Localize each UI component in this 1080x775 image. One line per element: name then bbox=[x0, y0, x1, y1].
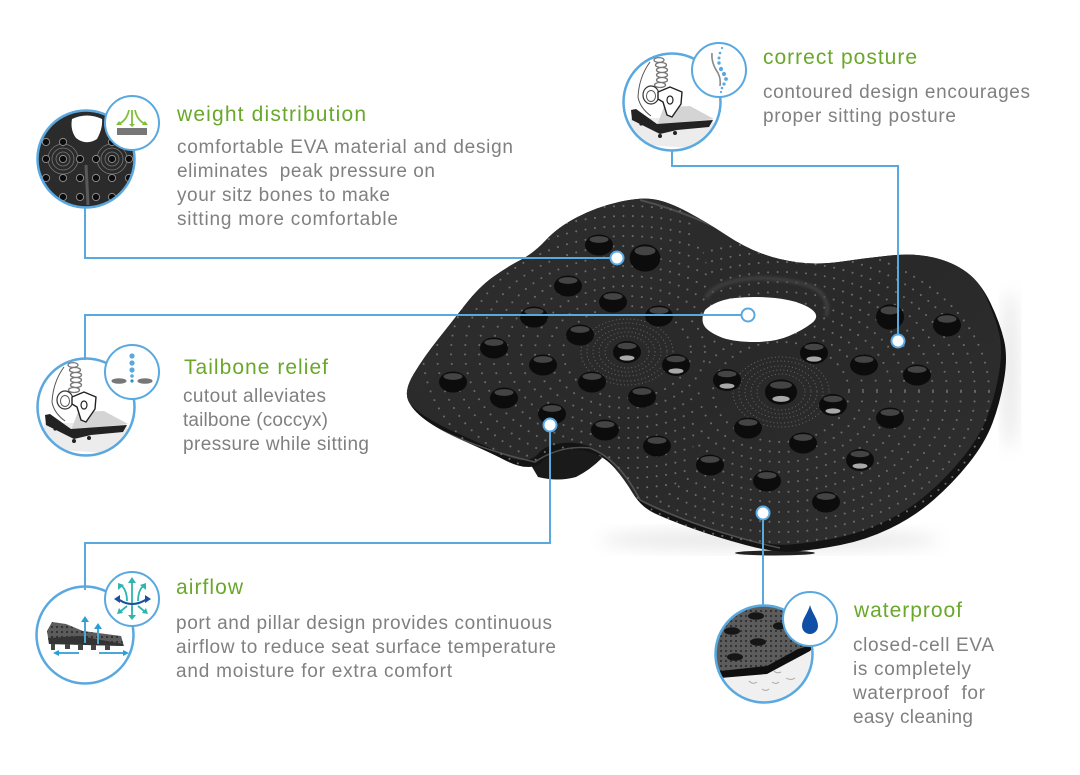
thumbnail: cushion top view bbox=[38, 110, 134, 208]
body text: your sitz bones to make bbox=[177, 185, 390, 206]
body text bbox=[176, 613, 556, 682]
body text: closed-cell EVA bbox=[853, 635, 994, 656]
body text: cutout alleviates bbox=[183, 386, 326, 407]
body text: port and pillar design provides continuous bbox=[176, 613, 552, 634]
panel: weight distribution bbox=[38, 96, 513, 230]
body text: eliminates peak pressure on bbox=[177, 161, 435, 182]
heading: airflow bbox=[176, 576, 244, 599]
thumbnail: cushion side with airflow arrows bbox=[36, 586, 134, 684]
marker: airflow bbox=[544, 418, 556, 432]
body text: comfortable EVA material and design bbox=[177, 137, 513, 158]
heading: Tailbone relief bbox=[184, 356, 328, 379]
marker: waterproof bbox=[756, 506, 770, 520]
icon: tailbone dots bbox=[105, 345, 159, 399]
icon: spine curve bbox=[692, 43, 746, 97]
heading: waterproof bbox=[853, 599, 962, 622]
body text: pressure while sitting bbox=[183, 434, 369, 455]
panel: airflow bbox=[36, 572, 556, 684]
body text bbox=[177, 137, 513, 230]
body text: is completely bbox=[853, 659, 972, 680]
cushion photo bbox=[402, 192, 1017, 555]
thumbnail: wet cushion surface bbox=[712, 602, 816, 702]
thumbnail: pelvis on cushion bbox=[38, 358, 136, 456]
callout lines bbox=[85, 150, 898, 606]
body text: contoured design encourages bbox=[763, 82, 1030, 103]
body text: airflow to reduce seat surface temperature bbox=[176, 637, 556, 658]
body text: easy cleaning bbox=[853, 707, 973, 728]
body text: sitting more comfortable bbox=[177, 209, 398, 230]
body text: and moisture for extra comfort bbox=[176, 661, 453, 682]
thumbnail: spine and pelvis on cushion bbox=[624, 54, 722, 150]
body text bbox=[852, 635, 994, 728]
icon: pressure arrows on bar bbox=[105, 96, 159, 150]
body text: tailbone (coccyx) bbox=[183, 410, 328, 431]
panel: correct posture bbox=[624, 43, 1030, 150]
heading: correct posture bbox=[763, 46, 917, 69]
icon: airflow arrows bbox=[105, 572, 159, 626]
body text bbox=[183, 386, 369, 455]
icon: water drop bbox=[783, 592, 837, 646]
marker: weight distribution bbox=[610, 252, 624, 264]
body text: waterproof for bbox=[852, 683, 986, 704]
heading: weight distribution bbox=[176, 103, 366, 126]
panel: tailbone relief bbox=[38, 345, 369, 456]
panel: waterproof bbox=[712, 592, 994, 728]
body text: proper sitting posture bbox=[763, 106, 956, 127]
marker: tailbone relief bbox=[742, 308, 754, 322]
body text bbox=[763, 82, 1030, 127]
marker: correct posture bbox=[892, 334, 904, 348]
